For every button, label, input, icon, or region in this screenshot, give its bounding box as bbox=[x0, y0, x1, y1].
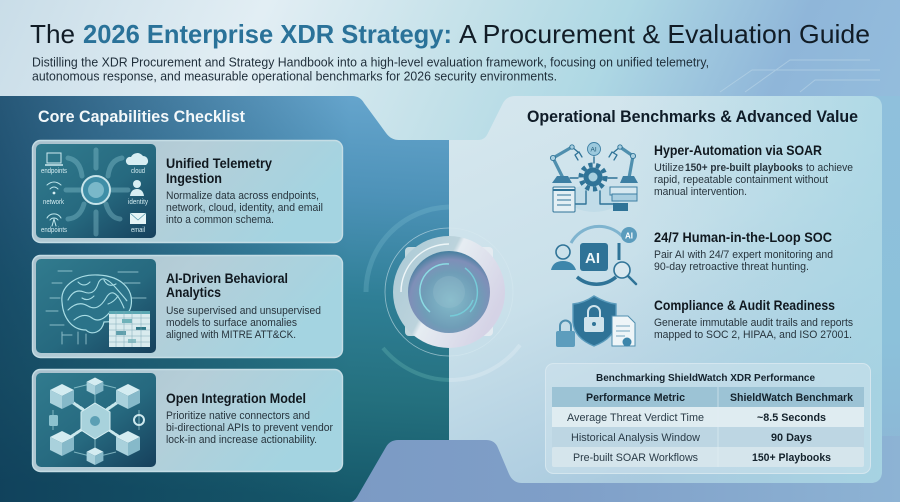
table row: verdict time: Average Threat Verdict Time bbox=[567, 412, 704, 424]
icon: integration network thumbnail bbox=[36, 373, 156, 467]
center dial bbox=[366, 207, 520, 380]
heading: operational benchmarks: Operational Benchmarks & Advanced Value bbox=[527, 107, 858, 126]
text: manual intervention. bbox=[654, 186, 747, 198]
text: Generate immutable audit trails and reports bbox=[654, 317, 853, 329]
table row: analysis window: 90 Days bbox=[771, 432, 812, 444]
data grid bbox=[109, 311, 150, 347]
card text: Use supervised and unsupervised bbox=[166, 305, 321, 317]
card text: Normalize data across endpoints, bbox=[166, 190, 319, 202]
subtitle: autonomous response, and measurable operational benchmarks for 2026 security environments. bbox=[32, 70, 557, 84]
table title: Benchmarking ShieldWatch XDR Performance bbox=[596, 372, 815, 384]
panel: benchmark table bbox=[546, 364, 870, 474]
icon: ai chip with analyst: AI bbox=[625, 232, 633, 240]
text: 150+ pre-built playbooks bbox=[685, 162, 803, 174]
card text: Unified Telemetry bbox=[166, 155, 272, 171]
icon: ai chip with analyst: AI bbox=[585, 250, 600, 267]
subtitle bbox=[32, 56, 709, 84]
icon labels: identity bbox=[128, 199, 148, 206]
heading: core capabilities checklist: Core Capabilities Checklist bbox=[38, 107, 245, 126]
card text: Analytics bbox=[166, 284, 221, 300]
table row: soar workflows: 150+ Playbooks bbox=[752, 452, 831, 464]
table header: Performance Metric bbox=[586, 392, 685, 404]
card text bbox=[166, 155, 323, 226]
card: ai-driven behavioral analytics bbox=[32, 256, 342, 358]
icon labels: email bbox=[131, 227, 145, 234]
icon labels: cloud bbox=[131, 168, 145, 175]
icon labels: endpoints bbox=[41, 227, 67, 234]
icon: robot arms and gear bbox=[550, 142, 638, 212]
text: 24/7 Human-in-the-Loop SOC bbox=[654, 229, 832, 245]
icon labels bbox=[41, 168, 148, 234]
card text: AI-Driven Behavioral bbox=[166, 270, 288, 286]
card: open integration model bbox=[32, 370, 342, 472]
table row: verdict time: ~8.5 Seconds bbox=[757, 412, 826, 424]
decorative circuit traces bbox=[720, 60, 880, 92]
table row: analysis window: Historical Analysis Window bbox=[571, 432, 700, 444]
panel: right edge band bbox=[860, 96, 900, 502]
card: unified telemetry ingestion bbox=[32, 140, 342, 242]
text bbox=[654, 297, 853, 341]
title: 2026 Enterprise XDR Strategy: bbox=[83, 19, 452, 49]
text: mapped to SOC 2, HIPAA, and ISO 27001. bbox=[654, 329, 852, 341]
text: Compliance & Audit Readiness bbox=[654, 297, 835, 313]
benefit: human-in-the-loop soc bbox=[551, 226, 833, 284]
icon labels: endpoints bbox=[41, 168, 67, 175]
table row: soar workflows bbox=[552, 447, 864, 467]
card text: bi-directional APIs to prevent vendor bbox=[166, 422, 333, 434]
table header: ShieldWatch Benchmark bbox=[730, 392, 854, 404]
text: 90-day retroactive threat hunting. bbox=[654, 261, 809, 273]
card text: into a common schema. bbox=[166, 214, 274, 226]
card text: Prioritize native connectors and bbox=[166, 410, 310, 422]
text: Pair AI with 24/7 expert monitoring and bbox=[654, 249, 833, 261]
text: rapid, repeatable containment without bbox=[654, 174, 828, 186]
card text bbox=[166, 390, 333, 446]
card text: models to surface anomalies bbox=[166, 317, 297, 329]
card text: aligned with MITRE ATT&CK. bbox=[166, 329, 296, 341]
icon: telemetry hub thumbnail bbox=[36, 144, 156, 238]
card text: network, cloud, identity, and email bbox=[166, 202, 323, 214]
card text: lock-in and increase actionability. bbox=[166, 434, 317, 446]
table header bbox=[552, 387, 864, 407]
icon: ai chip with analyst bbox=[551, 226, 637, 284]
panel: lower center block bbox=[340, 436, 900, 502]
title bbox=[30, 19, 870, 49]
text: Utilize bbox=[654, 162, 684, 174]
icon: robot arms and gear: AI bbox=[590, 146, 597, 154]
title: The bbox=[30, 19, 75, 49]
benefit: hyper-automation via soar bbox=[550, 142, 853, 212]
text: Hyper-Automation via SOAR bbox=[654, 142, 822, 158]
card text bbox=[166, 270, 321, 341]
table row: verdict time bbox=[552, 407, 864, 427]
panel: right glass panel bbox=[449, 96, 882, 483]
title: A Procurement & Evaluation Guide bbox=[459, 19, 870, 49]
benefit: compliance and audit readiness bbox=[556, 296, 853, 347]
table row: soar workflows: Pre-built SOAR Workflows bbox=[573, 452, 698, 464]
text bbox=[654, 229, 833, 273]
text: to achieve bbox=[806, 162, 853, 174]
table row: analysis window bbox=[552, 427, 864, 447]
subtitle: Distilling the XDR Procurement and Strategy Handbook into a high-level evaluation framework, focusing on unified telemetry, bbox=[32, 56, 709, 70]
icon: shield, locks and certificate bbox=[556, 296, 635, 347]
card text: Open Integration Model bbox=[166, 390, 306, 406]
icon: neural brain and data grid thumbnail bbox=[36, 259, 156, 353]
icon labels: network bbox=[43, 199, 64, 206]
card text: Ingestion bbox=[166, 170, 222, 186]
text bbox=[654, 142, 853, 198]
